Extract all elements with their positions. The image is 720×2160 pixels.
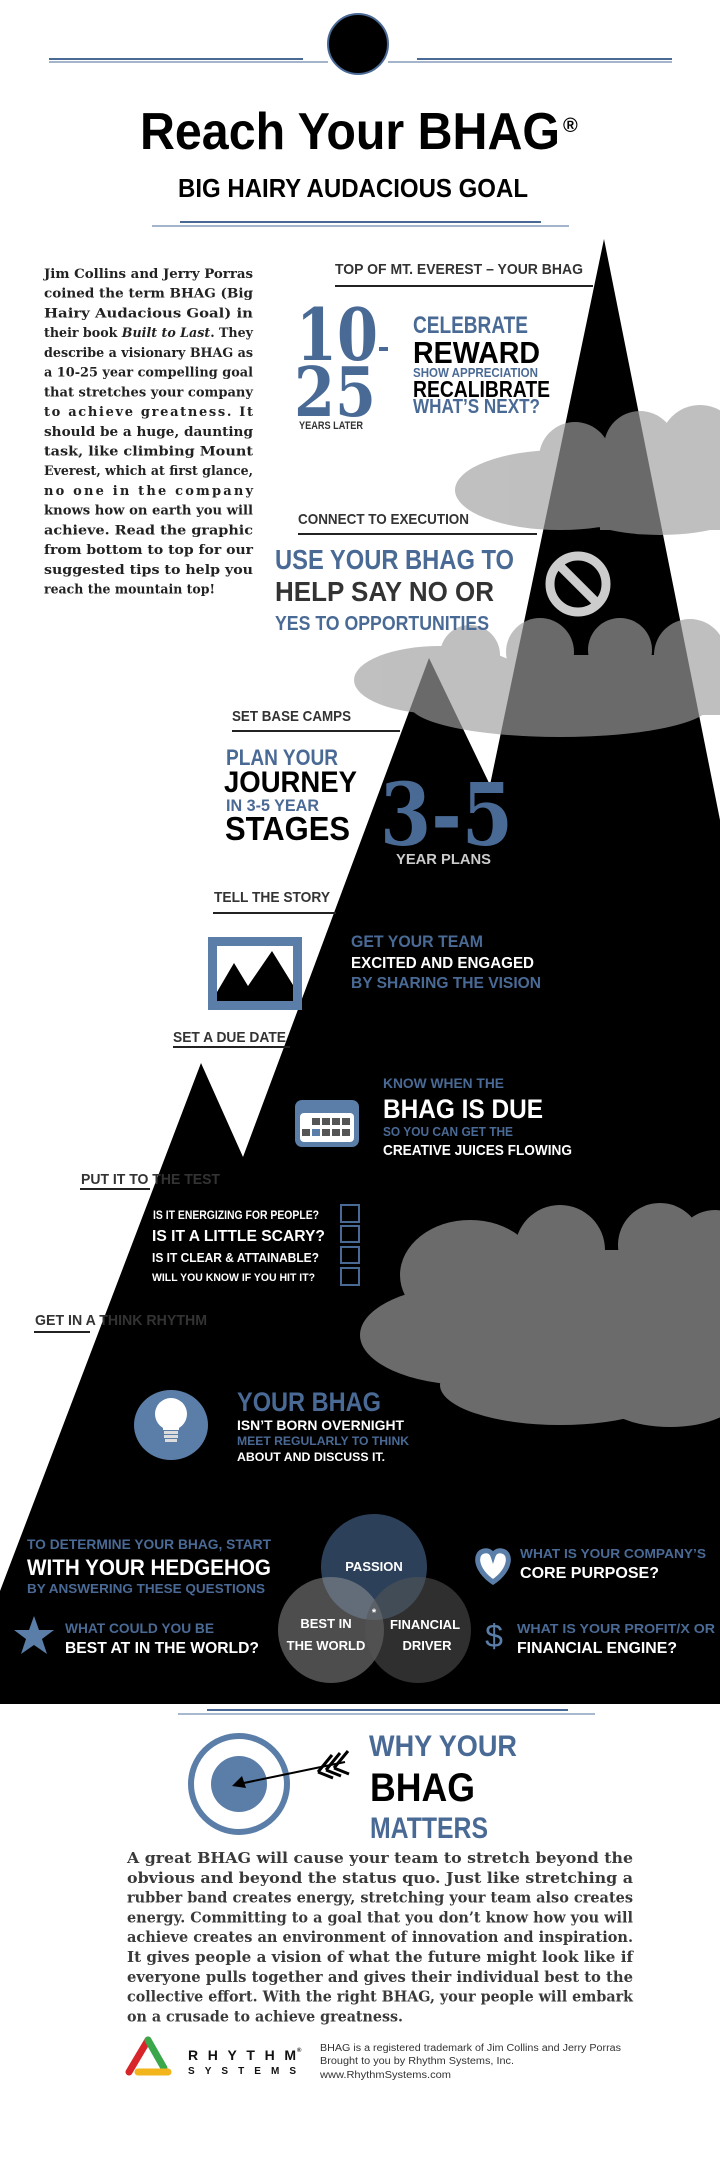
icon: target with arrow <box>191 1736 349 1832</box>
best at <box>65 1620 259 1657</box>
logo: rhythm systems: RHYTHM <box>188 2047 296 2063</box>
footer credits: Brought to you by Rhythm Systems, Inc. <box>320 2056 514 2067</box>
intro paragraph: coined the term BHAG (Big <box>44 287 253 302</box>
section: base camps: STAGES <box>225 810 350 847</box>
closing paragraph: achieve creates an environment of innovation and inspiration. <box>127 1928 633 1946</box>
venn diagram: THE WORLD <box>287 1638 365 1653</box>
section: base camps: YEAR PLANS <box>396 851 491 868</box>
financial engine: WHAT IS YOUR PROFIT/X OR <box>517 1621 716 1636</box>
intro paragraph: task, like climbing Mount <box>44 444 253 460</box>
title: ® <box>563 115 578 137</box>
section: connect to execution: HELP SAY NO OR <box>275 576 494 607</box>
financial engine: FINANCIAL ENGINE? <box>517 1640 677 1657</box>
section: due date: KNOW WHEN THE <box>383 1075 504 1091</box>
intro paragraph: a 10-25 year compelling goal <box>44 366 253 381</box>
closing paragraph: on a crusade to achieve greatness. <box>127 2007 403 2025</box>
core purpose <box>520 1546 706 1582</box>
section: top of everest: WHAT’S NEXT? <box>413 396 540 418</box>
big 10-25: 10 <box>296 292 378 377</box>
logo: rhythm systems <box>129 2040 302 2077</box>
venn diagram: PASSION <box>345 1559 403 1574</box>
core purpose: CORE PURPOSE? <box>520 1565 659 1582</box>
section: think rhythm: ABOUT AND DISCUSS IT. <box>237 1450 385 1464</box>
section: top of everest: SHOW APPRECIATION <box>413 365 538 380</box>
intro paragraph: achieve. Read the graphic <box>44 523 253 538</box>
intro paragraph: from bottom to top for our <box>44 543 253 558</box>
section: base camps: PLAN YOUR <box>226 745 338 770</box>
section: connect to execution: CONNECT TO EXECUTION <box>298 511 469 528</box>
hedgehog intro: BY ANSWERING THESE QUESTIONS <box>27 1581 265 1596</box>
hedgehog intro: WITH YOUR HEDGEHOG <box>27 1555 271 1580</box>
section: base camps: SET BASE CAMPS <box>232 708 351 725</box>
closing paragraph: A great BHAG will cause your team to stretch beyond the <box>126 1849 633 1867</box>
section: base camps <box>224 708 513 868</box>
cloud: lower dark <box>360 1203 720 1427</box>
closing paragraph: obvious and beyond the status quo. Just like stretching a <box>127 1869 633 1887</box>
intro paragraph: Jim Collins and Jerry Porras <box>43 267 253 282</box>
heading: why your bhag matters: BHAG <box>370 1766 475 1810</box>
section: think rhythm: YOUR BHAG <box>237 1387 381 1417</box>
intro paragraph: no one in the company <box>44 484 253 499</box>
venn diagram <box>278 1514 471 1683</box>
section: connect to execution: YES TO OPPORTUNITIES <box>275 613 489 635</box>
section: think rhythm: ISN’T BORN OVERNIGHT <box>237 1417 404 1433</box>
section: put it to the test: IS IT CLEAR & ATTAINABLE? <box>152 1250 319 1265</box>
intro paragraph: their book Built to Last. They <box>44 326 253 341</box>
big 10-25: 25 <box>294 353 376 433</box>
venn diagram: DRIVER <box>402 1638 452 1653</box>
section: due date: BHAG IS DUE <box>383 1094 543 1124</box>
section: tell the story <box>213 889 541 992</box>
icon: star <box>14 1616 54 1654</box>
icon: dollar: $ <box>485 1618 503 1654</box>
section: due date: SO YOU CAN GET THE <box>383 1124 513 1139</box>
footer credits <box>319 2043 621 2081</box>
intro paragraph: to achieve greatness. It <box>44 405 253 420</box>
venn diagram: FINANCIAL <box>390 1617 460 1632</box>
heading: why your bhag matters: MATTERS <box>370 1812 488 1845</box>
section: top of everest: YEARS LATER <box>299 420 363 432</box>
intro paragraph: reach the mountain top! <box>44 582 215 598</box>
intro paragraph: Hairy Audacious Goal) in <box>44 306 254 321</box>
header ornament <box>49 14 672 74</box>
cloud: middle <box>354 618 720 737</box>
section: connect to execution <box>275 511 537 635</box>
section: top of everest <box>294 261 593 433</box>
intro paragraph <box>43 267 254 598</box>
financial engine <box>517 1621 716 1657</box>
section: put it to the test: IS IT ENERGIZING FOR PEOPLE? <box>153 1208 319 1222</box>
intro paragraph: that stretches your company <box>44 385 253 400</box>
section: due date <box>173 1029 572 1159</box>
section: put it to the test: PUT IT TO THE TEST <box>81 1171 220 1188</box>
hedgehog intro <box>27 1536 271 1596</box>
logo: rhythm systems: SYSTEMS <box>188 2066 296 2077</box>
section: due date: CREATIVE JUICES FLOWING <box>383 1142 572 1159</box>
title: Reach Your BHAG <box>140 103 560 161</box>
closing paragraph: It gives people a vision of what the future might look like if <box>127 1948 635 1966</box>
heading: why your bhag matters: WHY YOUR <box>369 1730 517 1763</box>
section: tell the story: BY SHARING THE VISION <box>351 975 541 992</box>
venn diagram: BEST IN <box>300 1616 352 1631</box>
intro paragraph: Everest, which at first glance, <box>44 464 253 479</box>
heading: why your bhag matters <box>369 1730 517 1845</box>
section: put it to the test: WILL YOU KNOW IF YOU HIT IT? <box>152 1272 315 1284</box>
closing paragraph: everyone pulls together and gives their individual best to the <box>127 1968 633 1986</box>
icon: calendar <box>295 1100 359 1147</box>
icon: heart <box>478 1551 508 1582</box>
venn diagram: * <box>372 1607 377 1619</box>
section: top of everest: RECALIBRATE <box>413 376 550 402</box>
section: top of everest: TOP OF MT. EVEREST – YOUR BHAG <box>335 261 583 278</box>
intro paragraph: describe a visionary BHAG as <box>44 346 253 361</box>
cloud: top <box>455 405 720 535</box>
best at: WHAT COULD YOU BE <box>65 1620 214 1636</box>
footer credits: www.RhythmSystems.com <box>319 2070 451 2081</box>
intro paragraph: knows how on earth you will <box>44 504 253 519</box>
closing paragraph <box>126 1849 635 2025</box>
section: put it to the test <box>80 1171 325 1284</box>
closing paragraph: collective effort. With the right BHAG, your people will embark <box>127 1988 634 2006</box>
section: top of everest: CELEBRATE <box>413 312 528 339</box>
icon: no sign <box>550 556 606 612</box>
icon: lightbulb <box>134 1390 208 1460</box>
core purpose: WHAT IS YOUR COMPANY’S <box>520 1546 706 1561</box>
section: tell the story: TELL THE STORY <box>214 889 330 906</box>
closing paragraph: rubber band creates energy, stretching your team also creates <box>127 1889 633 1907</box>
section: base camps: IN 3-5 YEAR <box>226 796 319 815</box>
best at: BEST AT IN THE WORLD? <box>65 1640 259 1657</box>
footer credits: BHAG is a registered trademark of Jim Collins and Jerry Porras <box>320 2043 621 2054</box>
icon: picture <box>208 937 302 1010</box>
logo: rhythm systems: ® <box>297 2047 302 2054</box>
checkboxes <box>341 1205 359 1285</box>
mountains <box>0 239 720 1704</box>
intro paragraph: suggested tips to help you <box>44 563 253 578</box>
section: think rhythm: MEET REGULARLY TO THINK <box>237 1434 409 1448</box>
section: tell the story: GET YOUR TEAM <box>351 932 483 951</box>
section: tell the story: EXCITED AND ENGAGED <box>351 955 534 972</box>
section: think rhythm: GET IN A THINK RHYTHM <box>35 1312 207 1329</box>
section: put it to the test: IS IT A LITTLE SCARY? <box>152 1228 325 1245</box>
section: base camps: 3-5 <box>380 765 513 866</box>
section: base camps: JOURNEY <box>224 766 357 799</box>
closing paragraph: energy. Committing to a goal that you don’t know how you will <box>127 1908 633 1926</box>
section: top of everest: REWARD <box>413 335 540 370</box>
section: due date: SET A DUE DATE <box>173 1029 286 1046</box>
intro paragraph: should be a huge, daunting <box>44 425 253 440</box>
hedgehog intro: TO DETERMINE YOUR BHAG, START <box>27 1536 271 1552</box>
section: connect to execution: USE YOUR BHAG TO <box>275 544 514 575</box>
big 10-25 <box>294 292 388 433</box>
section: think rhythm <box>34 1312 409 1464</box>
subtitle: BIG HAIRY AUDACIOUS GOAL <box>178 173 528 203</box>
